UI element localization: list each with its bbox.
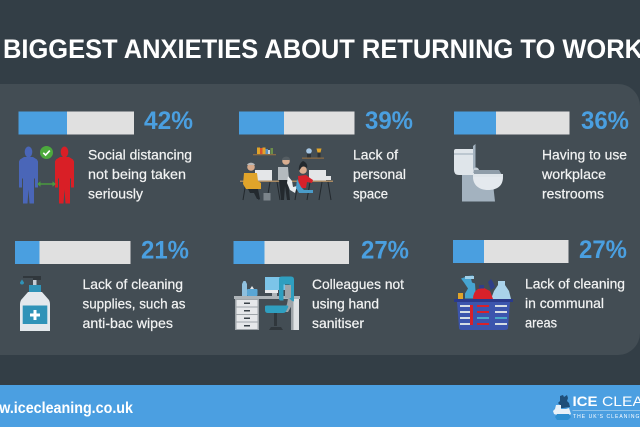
panel: statistics [0,84,640,355]
label: communal areas [525,276,625,330]
bar: 27% [234,241,349,264]
label: cleaning supplies: Lack of cleaning [82,276,183,292]
value: 39%: 39% [365,107,413,135]
icon: UK map [553,395,571,420]
stat: social distancing [18,107,193,204]
icon: crowded office [240,148,333,200]
bar: 21% [15,241,130,264]
label: social distancing: not being taken [88,166,186,182]
value: 21%: 21% [141,236,189,264]
bar: 42% [18,112,134,134]
icon: cleaning basket [454,276,513,330]
label: hand sanitiser [312,276,404,331]
bar: 27% [453,240,568,263]
value: 27%: 27% [579,236,627,264]
logo: ICE [572,393,598,409]
label: cleaning supplies [82,276,186,331]
label: personal space: personal [353,166,406,182]
value: 27%: 27% [361,236,409,264]
label: hand sanitiser: sanitiser [312,315,364,331]
label: cleaning supplies: supplies, such as [82,296,186,312]
label: hand sanitiser: using hand [312,296,379,312]
stat: communal areas [453,236,627,330]
logo [553,393,640,420]
stat: cleaning supplies [15,236,189,331]
label: communal areas: areas [525,314,557,330]
logo: THE UK'S CLEANING [573,414,640,420]
icon: toilet [454,144,503,202]
value: 36%: 36% [581,107,629,135]
label: personal space [353,146,406,202]
stat: hand sanitiser [234,236,409,331]
label: hand sanitiser: Colleagues not [312,276,404,292]
label: restrooms: workplace [541,166,606,182]
label: restrooms [541,146,627,202]
label: personal space: Lack of [353,146,398,162]
value: 42%: 42% [144,107,193,135]
icon: two people distancing [19,146,74,204]
label: personal space: space [353,186,388,202]
label: restrooms: Having to use [542,146,627,162]
icon: sanitiser bottle [20,276,50,331]
label: social distancing [88,146,192,202]
label: social distancing: seriously [88,186,143,202]
label: restrooms: restrooms [542,186,604,202]
label: cleaning supplies: anti-bac wipes [82,315,173,331]
stat: restrooms [454,107,629,202]
bar: 39% [239,112,354,134]
footer band [0,385,640,427]
label: communal areas: Lack of cleaning [525,276,625,292]
label: communal areas: in communal [525,295,604,311]
label: social distancing: Social distancing [88,146,192,162]
icon: office desk [234,276,300,330]
stat: personal space [239,107,413,202]
bar: 36% [454,112,570,134]
